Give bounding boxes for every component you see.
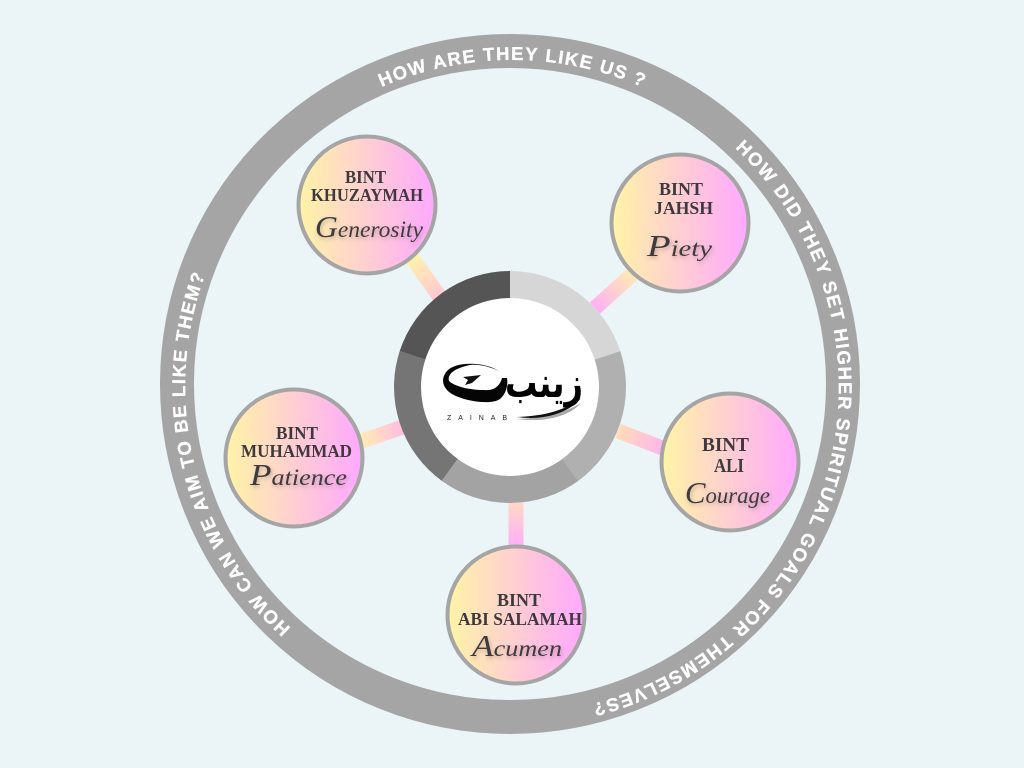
circle: Bint Muhammad [226, 390, 362, 526]
logo: Zainab calligraphy: زينب [505, 358, 583, 407]
ring text: how are they like us: HOW ARE THEY LIKE US ? [378, 47, 646, 87]
circle: Bint Jahsh: BINT [659, 179, 703, 199]
outer ring [160, 34, 860, 734]
ring text: how did they set higher spiritual goals: HOW DID THEY SET HIGHER SPIRITUAL GOALS FOR THEMSELVES? [596, 140, 852, 716]
circle: Bint Ali [662, 394, 798, 530]
circle: Bint Khuzaymah: BINT [345, 167, 386, 187]
circle: Bint Abi Salamah: Acumen [470, 628, 562, 663]
circle: Bint Khuzaymah [298, 136, 436, 274]
connectors from hub to circles [362, 258, 665, 545]
circle: Bint Abi Salamah [448, 546, 584, 684]
central hub donut [408, 285, 612, 489]
circle: Bint Ali: BINT [702, 434, 750, 456]
logo wordmark: ZAINAB [447, 415, 507, 422]
circle: Bint Abi Salamah: BINT [497, 590, 541, 610]
circle: Bint Jahsh [612, 154, 748, 292]
circle: Bint Jahsh: JAHSH [654, 198, 713, 218]
circle: Bint Khuzaymah: KHUZAYMAH [311, 185, 423, 205]
circle: Bint Khuzaymah: Generosity [315, 209, 424, 244]
logo: Zainab calligraphy [443, 358, 583, 422]
circle: Bint Ali: Courage [685, 475, 770, 510]
ring text: how can we aim to be like them: HOW CAN WE AIM TO BE LIKE THEM? [172, 272, 290, 636]
circle: Bint Muhammad: BINT [276, 423, 318, 443]
circle: Bint Muhammad: Patience [249, 457, 347, 492]
circle: Bint Jahsh: Piety [646, 228, 713, 263]
circle: Bint Abi Salamah: ABI SALAMAH [458, 609, 582, 629]
circle: Bint Muhammad: MUHAMMAD [241, 441, 352, 461]
circle: Bint Ali: ALI [714, 455, 744, 477]
